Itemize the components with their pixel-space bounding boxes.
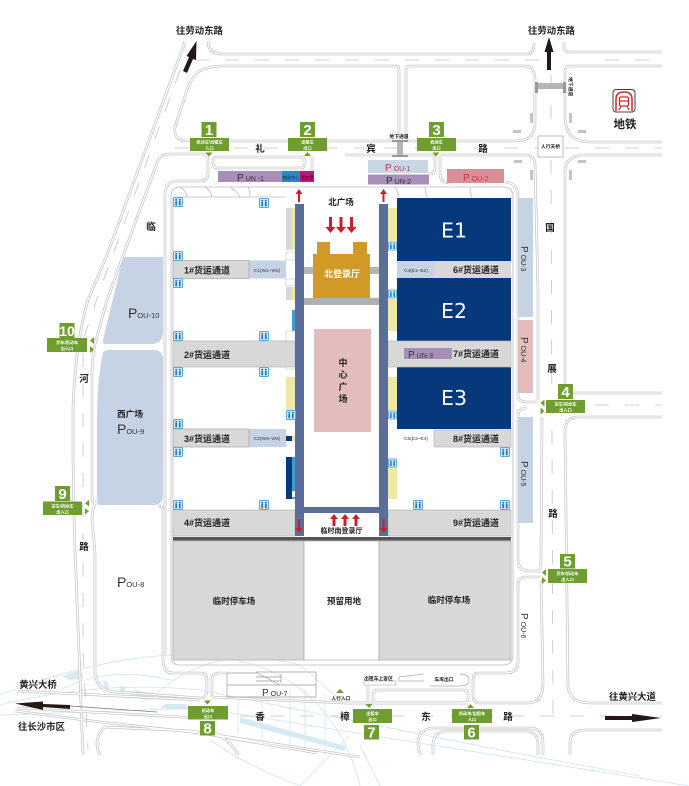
temporary parking west [173, 541, 304, 660]
temporary parking east: 临时停车场 [428, 595, 471, 605]
entrance 1: 1 [205, 122, 213, 139]
entrance 7 [353, 704, 392, 742]
road names [79, 143, 558, 723]
entrance 9 [43, 486, 89, 516]
entrance 1 [190, 122, 229, 156]
pedestrian entrance [331, 689, 351, 702]
destination labels: 往劳动东路 [176, 25, 224, 36]
parking: P UN-1 with service boxes: P UN -1 [237, 173, 264, 184]
parking: P OU-2 [447, 169, 504, 184]
metro label: 地铁 [614, 117, 637, 131]
P OU-7 parking: P OU-7 [262, 688, 288, 699]
entrance 6: 6 [467, 724, 476, 742]
hall E1 [397, 198, 511, 261]
connector C5 label: C5(E3~E4) [404, 436, 428, 442]
steel corridors [295, 204, 388, 536]
entrance 10: 出入口 [61, 345, 73, 352]
parking: P OU-9 west plaza: 西广场 [117, 408, 143, 419]
central plaza: 中 [338, 357, 348, 368]
dark divider [173, 537, 511, 540]
entrance 9: 货车/机动车 [51, 502, 74, 510]
entrance 2: 出口 [303, 144, 312, 152]
red arrows: temporary south hall [330, 514, 360, 526]
entrance 5 [542, 554, 587, 584]
freight lane 8 [434, 430, 511, 447]
freight lane 4: 4#货运通道 [184, 517, 230, 528]
footbridge stairs [513, 113, 586, 180]
hall E2: E2 [441, 299, 467, 323]
road names: 东 [421, 711, 431, 723]
entrance 8: 出口 [204, 713, 212, 720]
freight lane 7 with P UN-3: 7#货运通道 [453, 348, 499, 359]
parking: P UN-1 with service boxes: 管控室 [301, 174, 313, 181]
destination labels: 往劳动东路 [528, 25, 576, 36]
parking: P OU-4 [518, 320, 533, 393]
road names: 樟 [340, 711, 350, 723]
central plaza: 心 [338, 369, 348, 380]
parking: P OU-4: P OU-4 [518, 337, 529, 363]
freight lane 2: 2#货运通道 [184, 349, 230, 360]
road names: 香 [255, 711, 265, 723]
reserved land: 预留用地 [327, 596, 361, 606]
pedestrian footbridge: 人行天桥 [541, 143, 560, 150]
central plaza: 广 [338, 381, 348, 392]
freight lane 3 [173, 429, 249, 447]
P OU-7 parking [227, 672, 316, 699]
connector C1: C1(W1~W2) [254, 268, 281, 274]
temporary parking west: 临时停车场 [213, 596, 256, 606]
entrance 6 [452, 704, 492, 742]
hall E2 [397, 278, 511, 341]
freight lane 1: 1#货运通道 [184, 264, 230, 276]
central plaza [314, 329, 371, 432]
red arrows: corridor entrances [296, 189, 387, 533]
north plaza label: 北广场 [328, 197, 354, 207]
parking: P OU-6: P OU-6 [518, 613, 529, 639]
hall E3 [397, 367, 511, 429]
restroom icons [174, 198, 510, 510]
road names: 礼 [255, 143, 265, 155]
entrance 3: 机动车 [430, 138, 443, 146]
reserved land [304, 541, 379, 660]
entrance 1: 机动车/出租车 [196, 138, 223, 146]
garage exit [399, 674, 469, 686]
underpass: north junction: 地下通道 [567, 77, 574, 96]
entrance 3 [417, 122, 456, 156]
entrance 10 [47, 323, 94, 353]
entrance 10: 10 [59, 323, 75, 339]
connector C1 [249, 260, 286, 278]
red arrows: into north hall [326, 217, 356, 233]
road names: 路 [503, 711, 513, 723]
road names: 国 [545, 223, 555, 234]
entrance 4: 4 [561, 384, 570, 401]
entrance 8 [188, 700, 228, 738]
freight lane 1 [173, 260, 249, 278]
entrance 9: 9 [58, 486, 67, 503]
freight lane 9 [388, 510, 511, 536]
destination labels: 往长沙市区 [18, 721, 65, 732]
connector C2 [249, 429, 286, 447]
entrance 2: 2 [303, 122, 312, 139]
freight lane 7 with P UN-3: P UN-3 [408, 350, 433, 361]
entrance 2: 出租车 [301, 138, 314, 146]
temporary south hall label: 临时南登录厅 [320, 526, 362, 535]
freight lane 3: 3#货运通道 [184, 433, 230, 444]
road names: 展 [547, 364, 557, 375]
freight lane 6 [434, 261, 511, 278]
entrance 10: 货车/机动车 [56, 339, 78, 346]
road names: 路 [548, 508, 558, 520]
freight lane 2 [173, 341, 295, 367]
arrow: to Changsha city, west [15, 702, 70, 710]
arrow: to Huangxing Avenue, east [605, 714, 661, 722]
parking: P OU-10: POU-10 [128, 305, 159, 321]
entrance 7: 出口 [368, 716, 377, 723]
freight lane 4 [173, 510, 295, 536]
road names: 河 [79, 373, 89, 385]
entrance 9: 出入口 [56, 508, 69, 516]
freight lane 8: 8#货运通道 [453, 433, 499, 444]
parking: P OU-3 [518, 198, 533, 317]
underpass: Libin road [389, 133, 409, 157]
parking: P UN-1 with service boxes: 物业中心 [283, 174, 300, 181]
entrance 4: 出入口 [559, 406, 572, 414]
entrance 2 [288, 122, 327, 156]
connector C2: C2(W3~W4) [254, 436, 281, 442]
entrance 4: 货车/机动车 [554, 400, 577, 408]
road names: 路 [79, 541, 89, 553]
pedestrian entrance: 人行入口 [331, 695, 351, 702]
entrance 5: 出入口 [561, 576, 574, 583]
entrance 4 [540, 384, 585, 414]
entrance 7: 7 [367, 724, 376, 742]
arrow: to Laodong East Road, north [544, 37, 554, 70]
parking: P UN-1 with service boxes [218, 171, 314, 184]
entrance 3: 出口 [432, 144, 441, 152]
destination labels: 黄兴大桥 [19, 679, 57, 690]
entrance 1: 入口 [205, 146, 214, 152]
background map lines [0, 655, 689, 786]
taxi pick-up area: 出租车上客区 [364, 675, 393, 682]
parking: P OU-5: P OU-5 [518, 461, 529, 487]
parking: P OU-9 west plaza [97, 350, 163, 505]
parking: P OU-5 [518, 417, 533, 523]
entrance 7: 出租车 [366, 710, 379, 717]
entrance 8: 8 [203, 720, 212, 738]
connector C4: C4(E1~E2) [404, 268, 428, 274]
parking: P OU-10 [103, 257, 163, 344]
light blue bridge patches [62, 670, 345, 751]
parking: P OU-9 west plaza: POU-9 [117, 421, 144, 437]
central plaza: 场 [338, 393, 348, 404]
entrance 5: 货车/机动车 [556, 570, 579, 577]
underpass: north junction [535, 77, 574, 96]
underpass: Libin road: 地下通道 [389, 133, 409, 140]
taxi pick-up area [364, 675, 396, 685]
yellow and grey service strips [286, 208, 397, 499]
road names: 路 [478, 143, 488, 155]
grey link bar [304, 298, 379, 305]
road names: 临 [146, 221, 156, 233]
temporary parking east [379, 541, 511, 660]
parking: P OU-1 [368, 160, 428, 174]
north registration hall [304, 242, 379, 298]
connector C4 [397, 261, 434, 278]
entrance 5: 5 [563, 554, 572, 570]
metro icon [613, 90, 635, 112]
road centre lines [83, 60, 662, 750]
hall E3: E3 [441, 386, 467, 410]
parking: P UN-2: P UN-2 [386, 176, 411, 187]
freight lane 7 with P UN-3 [388, 341, 511, 367]
hall E1: E1 [441, 218, 467, 242]
destination labels: 往黄兴大道 [609, 691, 657, 702]
pedestrian footbridge [538, 136, 563, 157]
entrance 6: 入口 [468, 717, 476, 723]
parking: P UN-2 [368, 174, 429, 187]
freight lane 6: 6#货运通道 [453, 264, 499, 275]
north registration hall: 北登录厅 [324, 268, 360, 279]
freight lane 9: 9#货运通道 [453, 517, 499, 528]
parking: P OU-3: P OU-3 [518, 246, 529, 272]
arrow: to Laodong East Road, northwest [183, 41, 196, 73]
garage exit: 车库出口 [434, 676, 454, 683]
bridge dark line [70, 706, 157, 712]
entrance 6: 机动车/出租车 [459, 710, 485, 717]
venue outline [171, 187, 513, 665]
parking: P OU-8: POU-8 [117, 574, 144, 590]
road names: 宾 [366, 143, 376, 155]
parking: P OU-1: P OU-1 [385, 163, 411, 174]
parking: P OU-2: P OU-2 [463, 173, 489, 184]
entrance 8: 机动车 [202, 707, 214, 714]
entrance 3: 3 [432, 122, 441, 139]
